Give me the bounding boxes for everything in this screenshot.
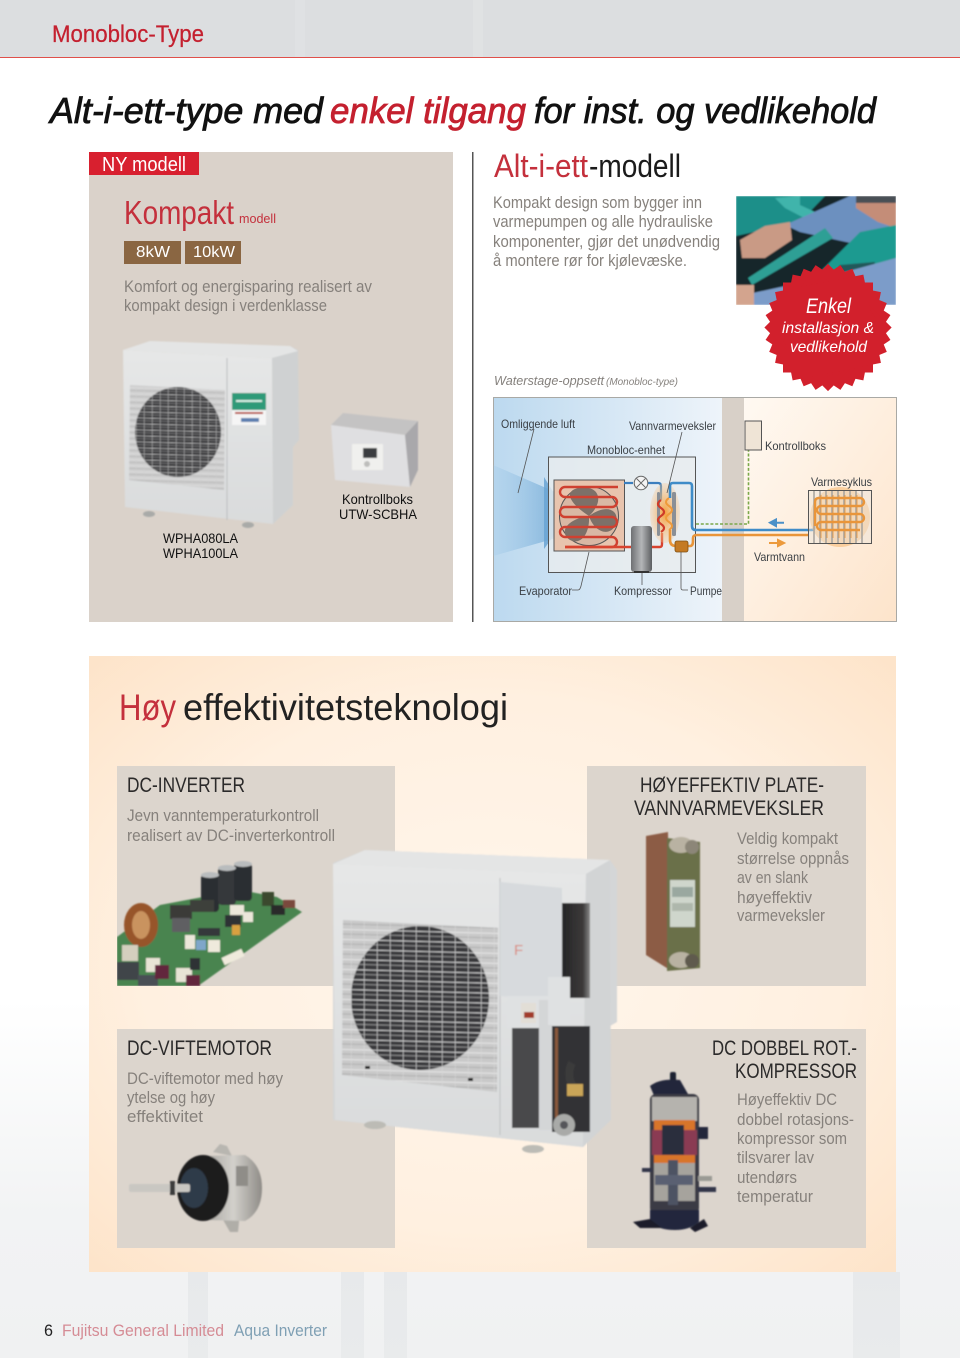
icon: compressor — [631, 526, 662, 573]
panel: DC twin rotary compressor: KOMPRESSOR — [735, 1060, 857, 1083]
panel: DC fan motor — [117, 1029, 395, 1248]
leader lines — [518, 429, 688, 590]
panel: DC fan motor: DC-VIFTEMOTOR — [127, 1037, 272, 1060]
panel: DC inverter: DC-INVERTER — [127, 774, 245, 797]
compressor cutaway — [633, 1072, 716, 1232]
all-in-one description: Kompakt design som bygger inn — [493, 193, 702, 212]
panel: DC twin rotary compressor: dobbel rotasjons- — [737, 1110, 854, 1129]
compact description: Komfort og energisparing realisert av — [124, 277, 372, 296]
panel: DC fan motor: ytelse og høy — [127, 1088, 215, 1107]
capacity badges — [124, 241, 241, 264]
starburst badge — [764, 264, 892, 391]
icon: pump — [675, 541, 688, 552]
panel: compact model — [89, 152, 453, 622]
panel: plate heat exchanger: HØYEFFEKTIV PLATE- — [640, 774, 824, 797]
heat exchanger photo — [646, 832, 700, 971]
icon: evaporator with fan — [554, 480, 631, 551]
footer: Aqua Inverter — [234, 1321, 327, 1340]
model labels: WPHA080LA — [163, 530, 239, 546]
panel: plate heat exchanger: VANNVARMEVEKSLER — [634, 797, 824, 820]
cutaway heat pump interior — [507, 903, 590, 1136]
panel: plate heat exchanger: av en slank — [737, 868, 808, 887]
diagram caption: Waterstage-oppsett — [494, 374, 605, 388]
main title: enkel tilgang — [330, 90, 526, 131]
diagram labels: Pumpe — [690, 584, 722, 598]
panel: plate heat exchanger — [587, 766, 866, 986]
monobloc unit box — [548, 457, 696, 572]
cut-off logo letter: F — [514, 942, 523, 959]
panel: DC twin rotary compressor: kompressor som — [737, 1129, 847, 1148]
footer — [44, 1321, 327, 1340]
starburst badge: vedlikehold — [790, 339, 868, 356]
main title — [48, 90, 877, 131]
section label: Monobloc-Type — [52, 21, 204, 48]
model labels: WPHA100LA — [163, 545, 239, 561]
compact heading: Kompakt — [124, 194, 234, 231]
diagram caption — [494, 374, 678, 388]
compact description: kompakt design i verdenklasse — [124, 296, 327, 315]
panel: plate heat exchanger: størrelse oppnås — [737, 849, 849, 868]
control wiring — [696, 450, 748, 524]
panel: DC inverter — [117, 766, 395, 986]
diagram labels: Omliggende luft — [501, 417, 576, 431]
icon: expansion valve — [624, 476, 661, 500]
footer: 6 — [44, 1321, 53, 1340]
starburst badge: installasjon & — [782, 320, 874, 337]
panel: DC twin rotary compressor: utendørs — [737, 1168, 797, 1187]
heading: all-in-one model — [494, 148, 681, 184]
panel: DC inverter: Jevn vanntemperaturkontroll — [127, 806, 319, 825]
icon: heating cycle radiator — [808, 487, 872, 547]
all-in-one description — [493, 193, 720, 270]
diagram labels: Kompressor — [614, 584, 672, 598]
cutaway cover plate — [500, 882, 562, 1000]
model labels: Kontrollboks — [342, 491, 413, 507]
main title: for inst. og vedlikehold — [534, 90, 877, 131]
central outdoor unit with cutaway — [333, 850, 617, 1153]
arrow: return flow — [770, 520, 784, 526]
heading: all-in-one model: Alt-i-ett — [494, 148, 588, 184]
panel: DC twin rotary compressor — [587, 1029, 866, 1248]
arrow: hot water flow — [769, 540, 784, 546]
diagram labels: Vannvarmeveksler — [629, 419, 716, 433]
icon: water heat exchanger — [650, 483, 680, 543]
panel: DC twin rotary compressor: DC DOBBEL ROT.- — [712, 1037, 857, 1060]
vertical divider — [472, 152, 474, 622]
chart: heat pump system diagram — [493, 397, 896, 622]
compact description — [124, 277, 372, 315]
circuit board photo — [117, 861, 302, 986]
diagram caption: (Monobloc-type) — [606, 377, 678, 388]
section heading: effektivitetsteknologi — [183, 687, 508, 728]
icon: control box — [745, 421, 762, 450]
panel: DC fan motor: effektivitet — [127, 1107, 203, 1126]
all-in-one description: varmepumpen og alle hydrauliske — [493, 212, 713, 231]
diagram labels: Monobloc-enhet — [587, 443, 666, 457]
diagram labels: Kontrollboks — [765, 439, 826, 453]
section heading: Høy — [119, 687, 176, 728]
compact heading: modell — [239, 211, 276, 226]
all-in-one description: komponenter, gjør det unødvendig — [493, 232, 720, 251]
panel: DC inverter: realisert av DC-inverterkontroll — [127, 826, 335, 845]
control box photo — [331, 413, 418, 487]
page background — [0, 1000, 960, 1358]
model labels — [163, 491, 418, 561]
water pipes — [670, 483, 815, 546]
technician photo — [736, 196, 896, 305]
capacity badges: 8kW — [136, 244, 171, 261]
outdoor unit photo — [123, 341, 299, 528]
panel: high efficiency technology — [89, 656, 896, 1272]
panel: DC twin rotary compressor: temperatur — [737, 1187, 813, 1206]
panel: DC fan motor: DC-viftemotor med høy — [127, 1069, 283, 1088]
all-in-one description: å montere rør for kjølevæske. — [493, 251, 687, 270]
main title: Alt-i-ett-type med — [48, 90, 324, 131]
starburst badge: Enkel — [806, 295, 852, 318]
panel: plate heat exchanger: varmeveksler — [737, 906, 825, 925]
diagram labels — [501, 417, 872, 598]
heading: all-in-one model: -modell — [589, 148, 681, 184]
panel: plate heat exchanger: høyeffektiv — [737, 888, 812, 907]
panel: DC twin rotary compressor: Høyeffektiv DC — [737, 1090, 837, 1109]
new model tag: NY modell — [102, 154, 186, 176]
diagram labels: Varmtvann — [754, 550, 805, 564]
model labels: UTW-SCBHA — [339, 506, 418, 522]
diagram labels: Evaporator — [519, 584, 572, 598]
icon: air flow — [493, 465, 568, 556]
capacity badges: 10kW — [193, 244, 236, 261]
header band — [0, 0, 960, 58]
diagram labels: Varmesyklus — [811, 475, 872, 489]
fan motor photo — [129, 1144, 262, 1232]
panel: DC twin rotary compressor: tilsvarer lav — [737, 1148, 814, 1167]
footer: Fujitsu General Limited — [62, 1321, 224, 1340]
panel: plate heat exchanger: Veldig kompakt — [737, 829, 838, 848]
